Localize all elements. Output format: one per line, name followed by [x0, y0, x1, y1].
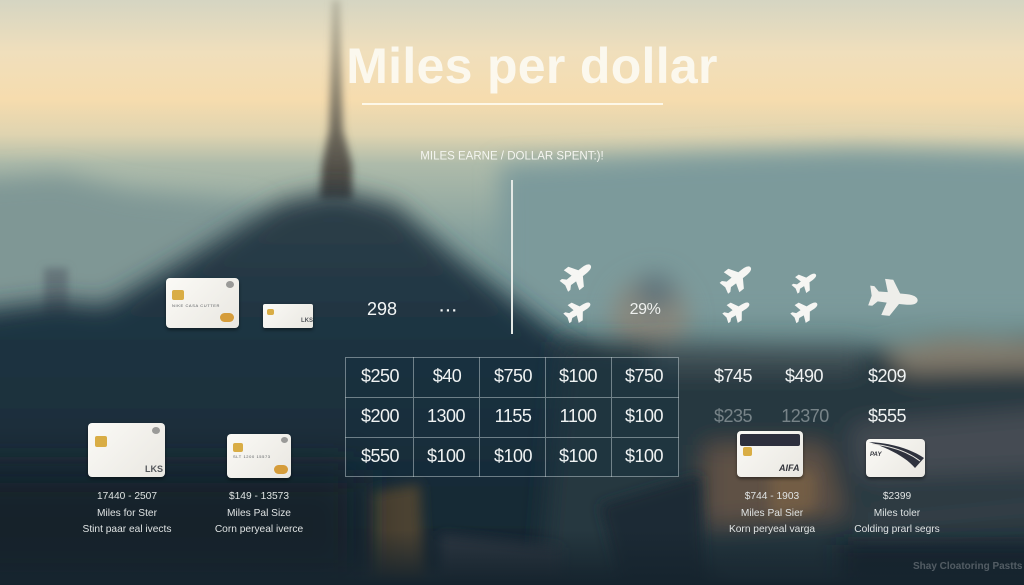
card: bottom left 1: LKS — [145, 464, 163, 474]
table: $40 — [433, 366, 461, 386]
title: Miles per dollar — [346, 38, 718, 94]
icon: plane 5 — [792, 274, 816, 294]
stat: 29%: 29% — [630, 301, 660, 318]
table: 1155 — [495, 406, 531, 426]
table: $750 — [625, 366, 663, 386]
card: top left large: NIKE CASA CUTTER — [172, 303, 220, 308]
table: $100 — [494, 446, 532, 466]
card: bottom right 2 — [866, 439, 925, 477]
stat: 298: 298 — [367, 299, 397, 319]
table: $750 — [494, 366, 532, 386]
card: bottom left 1 — [88, 423, 165, 477]
table: $100 — [559, 446, 597, 466]
table: $100 — [427, 446, 465, 466]
title underline — [362, 103, 663, 105]
icon: plane 6 — [790, 302, 818, 324]
caption: card 1: 17440 - 2507 — [97, 491, 157, 502]
extra values: $235 — [714, 406, 752, 426]
caption: card 1: Stint paar eal ivects — [83, 524, 171, 535]
card: top left small — [263, 304, 313, 328]
extra values: 12370 — [781, 406, 829, 426]
icon: plane 4 — [722, 302, 750, 324]
table: $100 — [625, 406, 663, 426]
caption: card 2: $149 - 13573 — [229, 491, 289, 502]
extra values: $555 — [868, 406, 906, 426]
footer note: Shay Cloatoring Pastts — [913, 561, 1022, 572]
table: $200 — [361, 406, 399, 426]
card: bottom right 1: AIFA — [779, 463, 800, 473]
extra values — [714, 366, 906, 426]
subtitle: MILES EARNE / DOLLAR SPENT:)! — [420, 150, 604, 162]
table: 1100 — [560, 406, 596, 426]
card: bottom left 2 — [227, 434, 291, 478]
card: bottom left 2: SLT 1200 15573 — [233, 454, 271, 459]
icon: plane 3 — [720, 266, 752, 294]
caption: card 4 — [854, 491, 940, 535]
stat: dots: ... — [439, 298, 459, 316]
table: $550 — [361, 446, 399, 466]
caption: card 4: $2399 — [883, 491, 911, 502]
caption: card 3 — [729, 491, 816, 535]
table — [345, 357, 679, 477]
table: 1300 — [427, 406, 465, 426]
caption: card 1: Miles for Ster — [97, 508, 157, 518]
caption: card 2: Corn peryeal iverce — [215, 524, 303, 535]
table: $100 — [625, 446, 663, 466]
table: $250 — [361, 366, 399, 386]
caption: card 2: Miles Pal Size — [227, 508, 291, 518]
caption: card 1 — [83, 491, 172, 535]
caption: card 4: Miles toler — [874, 508, 920, 518]
icon: plane 2 — [563, 302, 590, 324]
caption: card 3: $744 - 1903 — [745, 491, 799, 502]
extra values: $209 — [868, 366, 906, 386]
card: bottom right 1 — [737, 431, 803, 477]
table: $100 — [559, 366, 597, 386]
caption: card 3: Miles Pal Sier — [741, 508, 803, 518]
caption: card 2 — [215, 491, 303, 535]
icon: large plane — [868, 278, 918, 316]
card: top left small: LKS — [301, 318, 313, 324]
vertical axis line — [511, 180, 513, 334]
extra values: $490 — [785, 366, 823, 386]
card: top left large — [166, 278, 239, 328]
extra values: $745 — [714, 366, 752, 386]
caption: card 4: Colding prarl segrs — [854, 524, 940, 535]
card: bottom right 2: PAY — [870, 452, 881, 458]
icon: plane 1 — [560, 264, 592, 292]
caption: card 3: Korn peryeal varga — [729, 524, 815, 535]
